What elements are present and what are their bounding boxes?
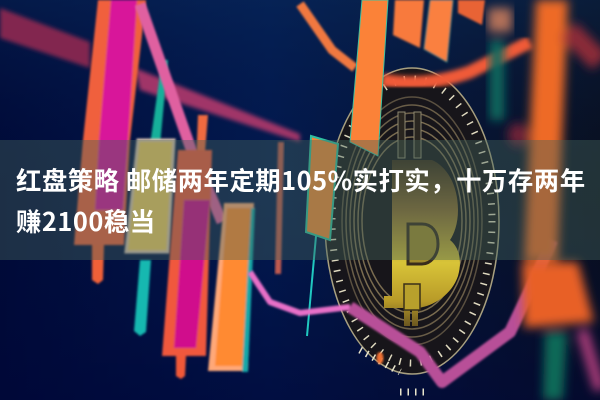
coin: [325, 68, 499, 374]
title: [16, 162, 586, 239]
blurred right candle: [508, 0, 600, 400]
tall orange bar: [350, 0, 388, 156]
top left dotted trend line: [0, 8, 300, 142]
title: 赚2100稳当: [16, 203, 156, 239]
diagonal pink line: [140, 4, 222, 222]
orange dot: [376, 352, 384, 364]
square candle: [306, 136, 338, 336]
top orange bars: [393, 0, 485, 62]
yellow candle: [126, 140, 174, 336]
thin candle wick: [275, 142, 284, 274]
magenta candle: [162, 150, 212, 379]
title: 红盘策略 邮储两年定期105%实打实，十万存两年: [16, 162, 586, 198]
teal wick: [150, 60, 168, 145]
orange candle: [208, 203, 255, 372]
orange wick: [196, 115, 208, 165]
teal blurred candle: [488, 8, 512, 120]
lower pink trend line: [250, 240, 552, 382]
pink candle: [74, 0, 146, 284]
translucent title band: [0, 140, 600, 260]
coin bottom glints: [360, 350, 430, 392]
upper orange line: [300, 4, 530, 83]
